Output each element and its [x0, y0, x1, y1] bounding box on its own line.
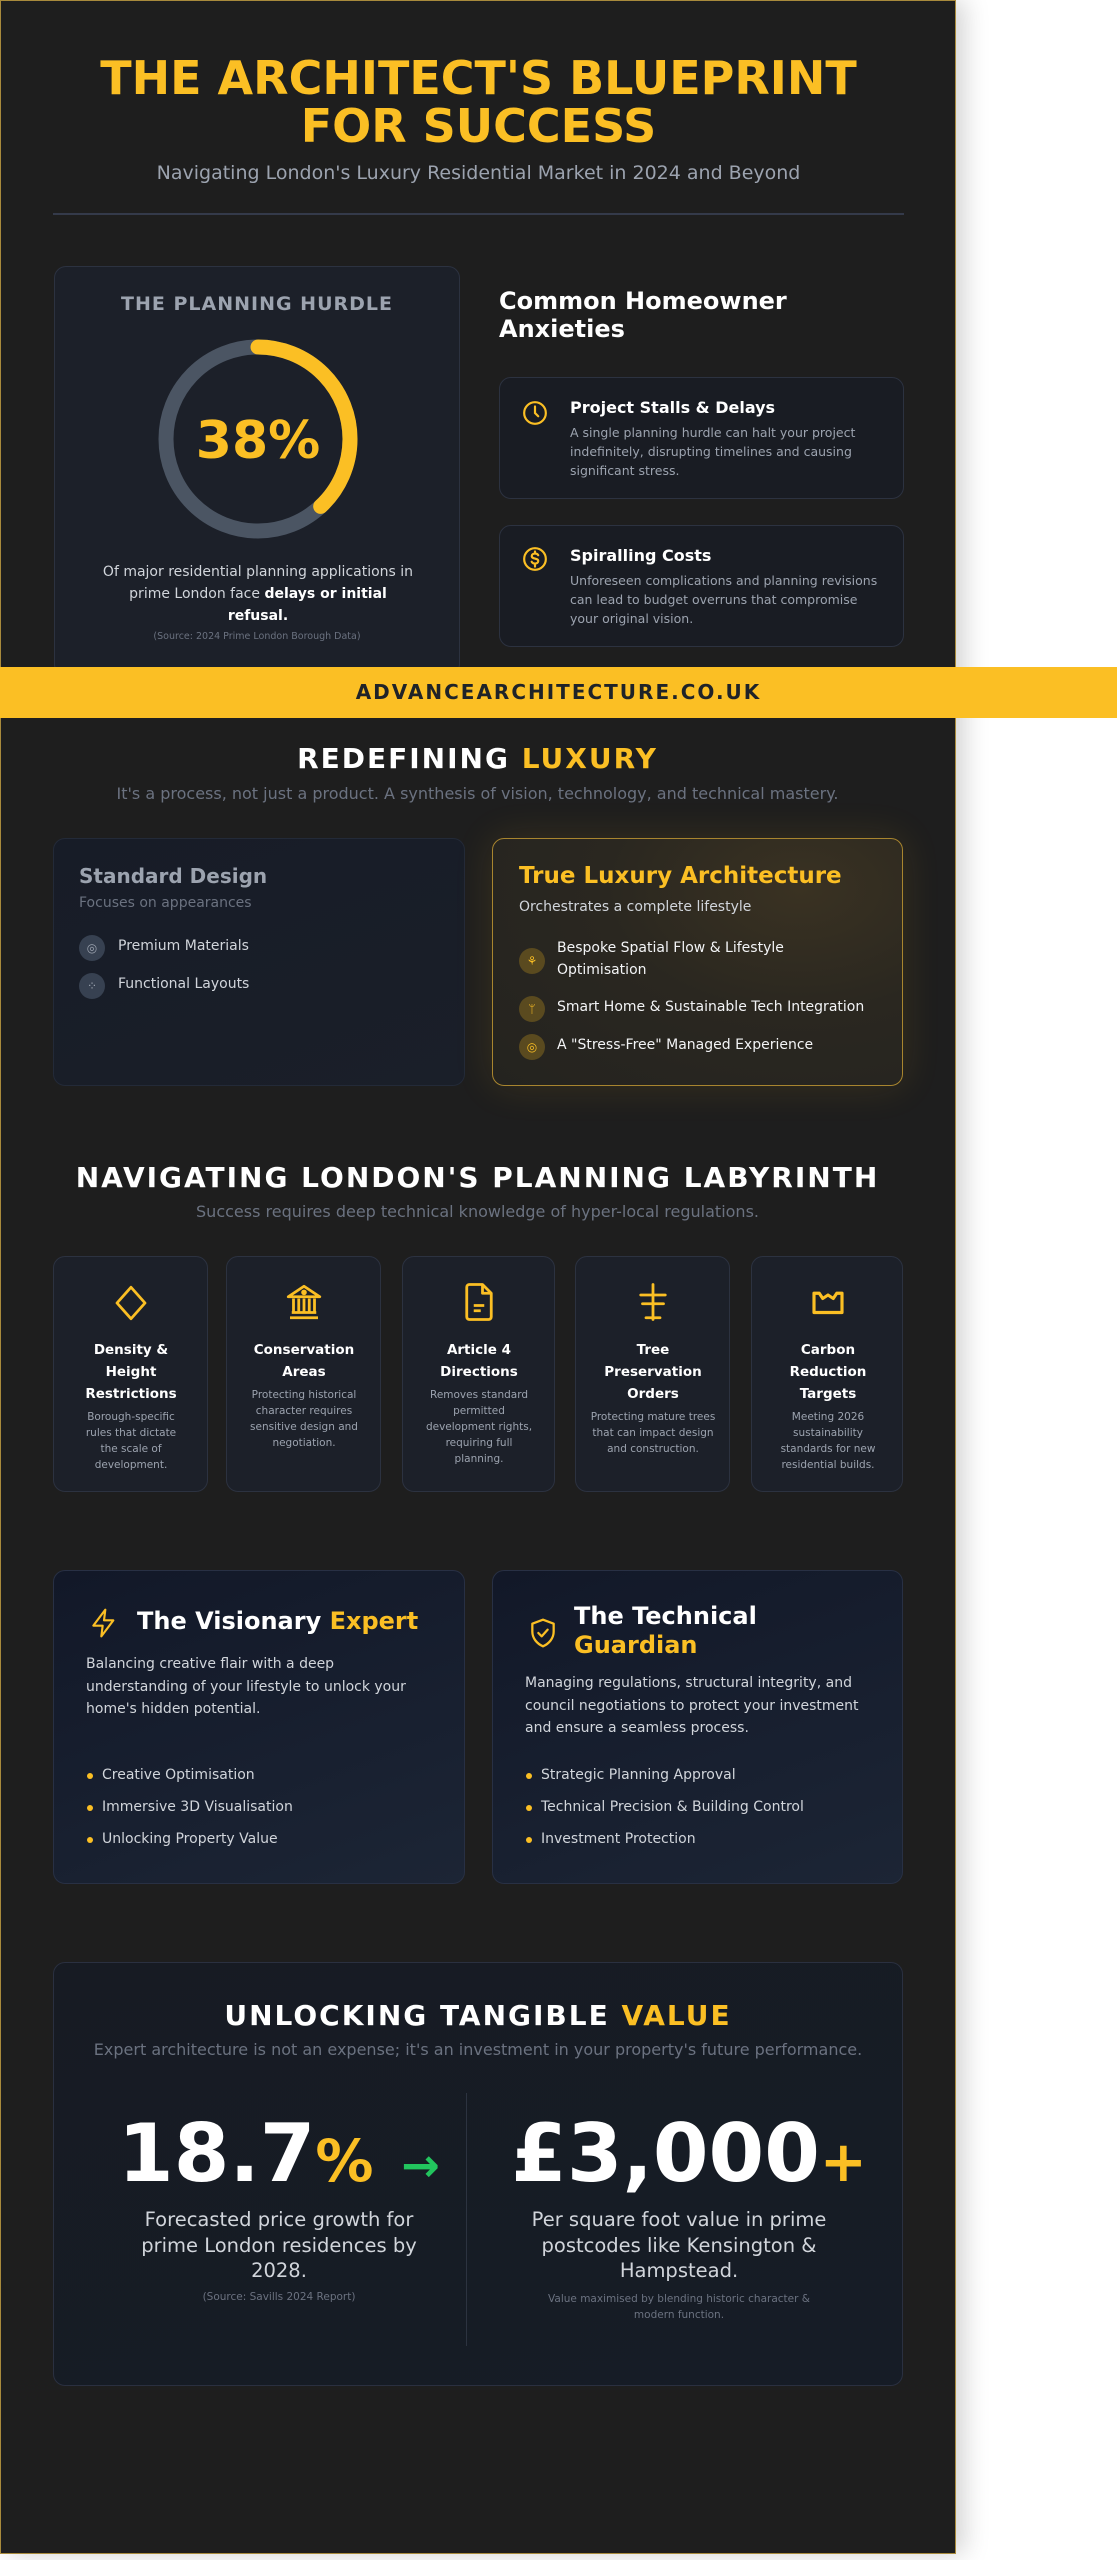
item: bespoke: Bespoke Spatial Flow & Lifestyle Optimisation [557, 940, 784, 978]
panel: true luxury: True Luxury Architecture [519, 863, 842, 889]
panel: technical guardian [492, 1570, 903, 1884]
panel: tangible value: (Source: Savills 2024 Report) [203, 2291, 355, 2303]
card: spiralling costs: Spiralling Costs [570, 546, 711, 565]
item: premium materials: Premium Materials [118, 938, 249, 954]
card: article 4: Article 4 Directions [440, 1342, 518, 1380]
heading: anxieties: Common Homeowner [499, 287, 787, 315]
item: functional layouts [79, 973, 249, 999]
banner [0, 667, 1117, 718]
icon: shield [531, 1618, 555, 1648]
chart: 38% ring: 38% [196, 411, 320, 471]
title [100, 51, 857, 153]
heading: planning labyrinth: NAVIGATING LONDON'S PLANNING LABYRINTH [76, 1161, 879, 1194]
card: conservation: Conservation Areas [254, 1342, 354, 1380]
card: spiralling costs: Unforeseen complications and planning revisions can lead to budget overruns that compromise your original vision. [570, 573, 877, 626]
panel: tangible value: Value maximised by blending historic character & modern function. [548, 2293, 810, 2321]
list: visionary [87, 1767, 293, 1847]
chart: 38% ring [158, 340, 358, 538]
banner: ADVANCEARCHITECTURE.CO.UK [356, 680, 761, 704]
panel: true luxury [492, 838, 903, 1086]
icon: clock [523, 401, 547, 425]
heading: anxieties: Anxieties [499, 315, 625, 343]
item: stress-free [519, 1034, 813, 1060]
card: project stalls [499, 377, 904, 499]
list: technical: Technical Precision & Building Control [541, 1799, 804, 1815]
item: stress-free: ◎ [527, 1040, 537, 1054]
panel: technical guardian: Managing regulations, structural integrity, and council negotiations to protect your investment and ensure a seamless process. [525, 1675, 859, 1736]
list: technical: Strategic Planning Approval [541, 1767, 736, 1783]
card: density: Borough-specific rules that dictate the scale of development. [86, 1411, 176, 1471]
item: smart home: ᛘ [528, 1002, 536, 1016]
panel: visionary expert: Balancing creative flair with a deep understanding of your lifestyle to unlock your home's hidden potential. [86, 1656, 406, 1717]
panel: standard design: Focuses on appearances [79, 895, 252, 911]
card: spiralling costs [499, 525, 904, 647]
panel: standard design: Standard Design [79, 864, 267, 888]
card: project stalls: A single planning hurdle can halt your project indefinitely, disrupting timelines and causing significant stress. [570, 425, 855, 478]
item: premium materials: ◎ [87, 941, 97, 955]
heading: redefining luxury: REDEFINING LUXURY [297, 742, 658, 775]
heading: value: UNLOCKING TANGIBLE VALUE [224, 1999, 732, 2032]
card: density [53, 1256, 208, 1492]
panel: tangible value: Expert architecture is not an expense; it's an investment in your property's future performance. [94, 2040, 862, 2059]
icon: dollar [523, 547, 547, 571]
card: carbon [751, 1256, 903, 1492]
item: premium materials [79, 935, 249, 961]
card: conservation [226, 1256, 381, 1492]
stat: 18.7% [118, 2107, 440, 2303]
item: smart home [519, 996, 864, 1022]
card: article 4: Removes standard permitted development rights, requiring full planning. [426, 1389, 532, 1465]
card: tree preservation: Protecting mature trees that can impact design and construction. [591, 1411, 715, 1455]
item: functional layouts: ⁘ [87, 979, 97, 993]
stat: £3,000+: £3,000+ [511, 2107, 867, 2200]
icon: lightning [92, 1608, 114, 1638]
panel: technical guardian: Guardian [574, 1631, 698, 1659]
stat: £3,000+: Per square foot value in prime postcodes like Kensington & Hampstead. [532, 2208, 826, 2282]
subtitle: labyrinth: Success requires deep technical knowledge of hyper-local regulations. [196, 1202, 759, 1221]
stat: 18.7%: 18.7% → [118, 2107, 440, 2200]
panel: true luxury: Orchestrates a complete lifestyle [519, 899, 751, 915]
list: visionary: Creative Optimisation [102, 1767, 255, 1783]
item: stress-free: A "Stress-Free" Managed Experience [557, 1037, 813, 1053]
stat: 18.7%: Forecasted price growth for prime London residences by 2028. [141, 2208, 417, 2282]
heading: planning hurdle: THE PLANNING HURDLE [121, 293, 393, 315]
card: carbon: Meeting 2026 sustainability standards for new residential builds. [781, 1411, 875, 1471]
list: technical: Investment Protection [541, 1831, 696, 1847]
card: tree preservation [575, 1256, 730, 1492]
panel: planning hurdle [54, 266, 460, 676]
item: smart home: Smart Home & Sustainable Tech Integration [557, 999, 864, 1015]
list: technical [526, 1767, 804, 1847]
card: tree preservation: Tree Preservation Orders [604, 1342, 702, 1402]
card: density: Density & Height Restrictions [85, 1342, 177, 1402]
list: visionary: Unlocking Property Value [102, 1831, 278, 1847]
panel: technical guardian: The Technical [574, 1602, 757, 1630]
item: bespoke: ⚘ [527, 954, 537, 968]
card: carbon: Carbon Reduction Targets [790, 1342, 866, 1402]
list: visionary: Immersive 3D Visualisation [102, 1799, 293, 1815]
panel: visionary expert: The Visionary Expert [137, 1607, 418, 1635]
panel: visionary expert [53, 1570, 465, 1884]
stat: £3,000+ [511, 2107, 867, 2321]
subtitle: Navigating London's Luxury Residential Market in 2024 and Beyond [157, 162, 800, 184]
text: source: (Source: 2024 Prime London Borough Data) [153, 631, 361, 642]
title: FOR SUCCESS [301, 99, 656, 153]
panel: standard design [53, 838, 465, 1086]
item: functional layouts: Functional Layouts [118, 976, 249, 992]
subtitle: redefining: It's a process, not just a product. A synthesis of vision, technology, and technical mastery. [117, 784, 838, 803]
card: project stalls: Project Stalls & Delays [570, 398, 775, 417]
panel: tangible value [53, 1962, 903, 2386]
heading: anxieties [499, 287, 787, 343]
card: article 4 [402, 1256, 555, 1492]
text: description: Of major residential planning applications in prime London face delays or initial refusal. [103, 564, 413, 624]
card: conservation: Protecting historical character requires sensitive design and negotiation. [250, 1389, 358, 1449]
title: THE ARCHITECT'S BLUEPRINT [100, 51, 857, 105]
